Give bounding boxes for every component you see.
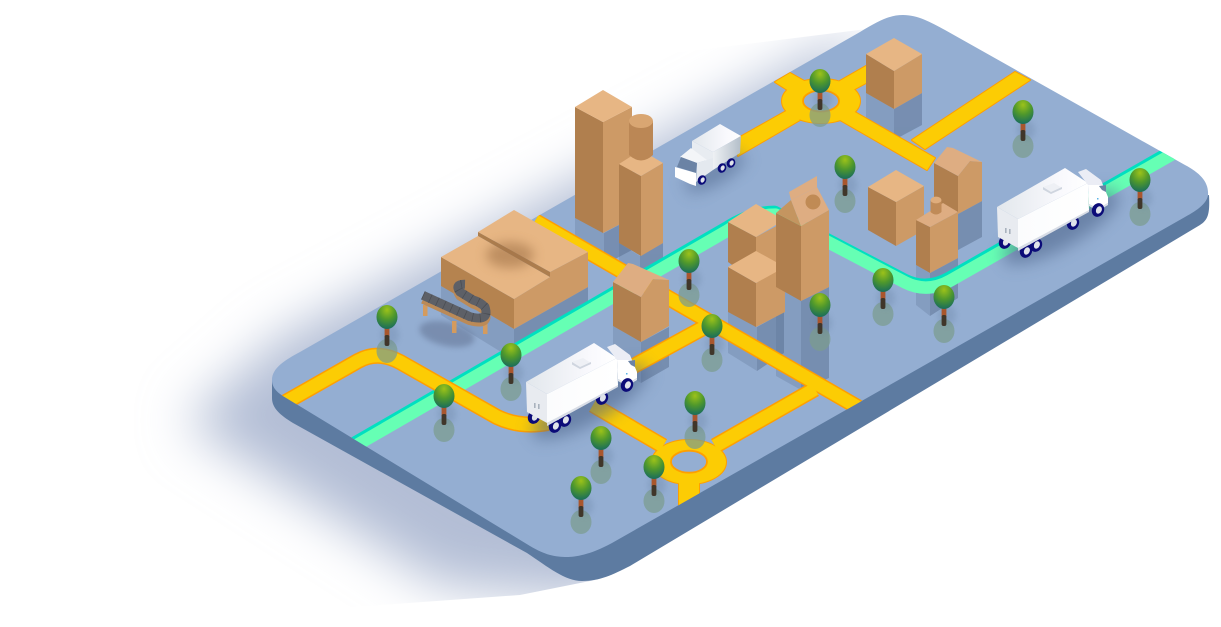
tower with cylinder top	[619, 114, 663, 256]
conveyor belt	[417, 284, 488, 352]
platform top surface	[272, 15, 1208, 557]
tall tower	[575, 90, 632, 233]
yellow roads	[270, 66, 1030, 515]
green route	[344, 148, 1180, 452]
central rear box	[728, 204, 784, 282]
roundabout islands	[671, 90, 839, 473]
bottle shaped building	[916, 197, 958, 273]
right cluster box	[868, 170, 924, 246]
cast shadow behind platform	[185, 30, 860, 600]
large truck on yellow road	[523, 343, 657, 452]
building reflections	[441, 93, 982, 390]
large truck on green road	[994, 168, 1128, 277]
central front box	[728, 251, 785, 327]
road network	[270, 66, 1180, 515]
small white truck	[675, 124, 750, 199]
platform side edge	[272, 195, 1209, 581]
platform base	[272, 15, 1209, 581]
carton shaped tower	[776, 176, 829, 301]
right cluster house	[934, 147, 982, 214]
warehouse building	[441, 210, 588, 329]
house by the road	[613, 263, 669, 342]
trees	[376, 69, 1152, 534]
top right box	[866, 38, 922, 109]
